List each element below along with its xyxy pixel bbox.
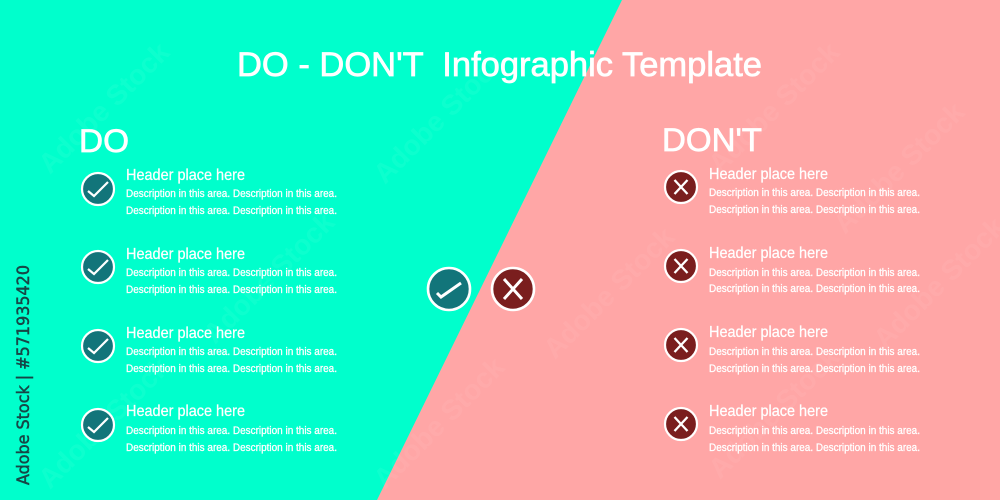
don't item 1: [665, 166, 920, 216]
don't item 3: [665, 324, 920, 375]
do item 4: Description in this area. Description in this area.: [126, 425, 337, 437]
do item 2: [82, 246, 337, 296]
do item 4: Header place here: [126, 403, 245, 420]
stock watermark pattern: Adobe Stock: [827, 96, 971, 239]
don't item 4: Description in this area. Description in this area.: [709, 425, 920, 437]
do item 3: Description in this area. Description in this area.: [126, 363, 337, 375]
do item 2: Header place here: [126, 246, 245, 263]
heading: don't: DON'T: [662, 122, 762, 158]
heading: do: DO: [79, 123, 129, 159]
icon: large cross: [492, 268, 534, 310]
do item 3: Header place here: [126, 325, 245, 342]
do item 1: Description in this area. Description in this area.: [126, 205, 337, 217]
don't item 2: [665, 245, 920, 295]
do item 3: Description in this area. Description in this area.: [126, 346, 337, 358]
stock watermark pattern: Adobe Stock: [537, 221, 681, 364]
don't item 1: Description in this area. Description in this area.: [709, 187, 920, 199]
stock watermark pattern: Adobe Stock: [32, 36, 176, 179]
stock watermark pattern: Adobe Stock: [702, 36, 846, 179]
do item 4: Description in this area. Description in this area.: [126, 442, 337, 454]
panel: do list: [79, 123, 337, 454]
don't item 1: Header place here: [709, 166, 828, 183]
do item 2: Description in this area. Description in this area.: [126, 267, 337, 279]
do item 3: [82, 325, 337, 375]
do item 4: [82, 403, 337, 454]
don't item 4: Header place here: [709, 403, 828, 420]
icon: large check: [428, 268, 470, 310]
title: DO - DON'T Infographic Template: [237, 46, 762, 84]
panel: don't list: [662, 122, 920, 454]
do item 1: Header place here: [126, 167, 245, 184]
do item 1: Description in this area. Description in this area.: [126, 188, 337, 200]
don't item 2: Description in this area. Description in this area.: [709, 267, 920, 279]
don't item 3: Description in this area. Description in this area.: [709, 346, 920, 358]
don't item 3: Description in this area. Description in this area.: [709, 363, 920, 375]
don't item 2: Header place here: [709, 245, 828, 262]
stock watermark pattern: Adobe Stock: [367, 351, 511, 494]
stock watermark pattern: Adobe Stock: [197, 206, 341, 349]
stock watermark pattern: Adobe Stock: [32, 351, 176, 494]
don't item 4: Description in this area. Description in this area.: [709, 442, 920, 454]
don't item 4: [665, 403, 920, 454]
don't item 2: Description in this area. Description in this area.: [709, 283, 920, 295]
stock watermark pattern: Adobe Stock: [702, 341, 846, 484]
don't item 1: Description in this area. Description in this area.: [709, 204, 920, 216]
do item 1: [82, 167, 337, 217]
panel: don't background: [377, 0, 1000, 500]
do item 2: Description in this area. Description in this area.: [126, 284, 337, 296]
stock id vertical text: Adobe Stock | #571935420: [14, 265, 33, 485]
stock watermark pattern: Adobe Stock: [367, 46, 511, 189]
don't item 3: Header place here: [709, 324, 828, 341]
